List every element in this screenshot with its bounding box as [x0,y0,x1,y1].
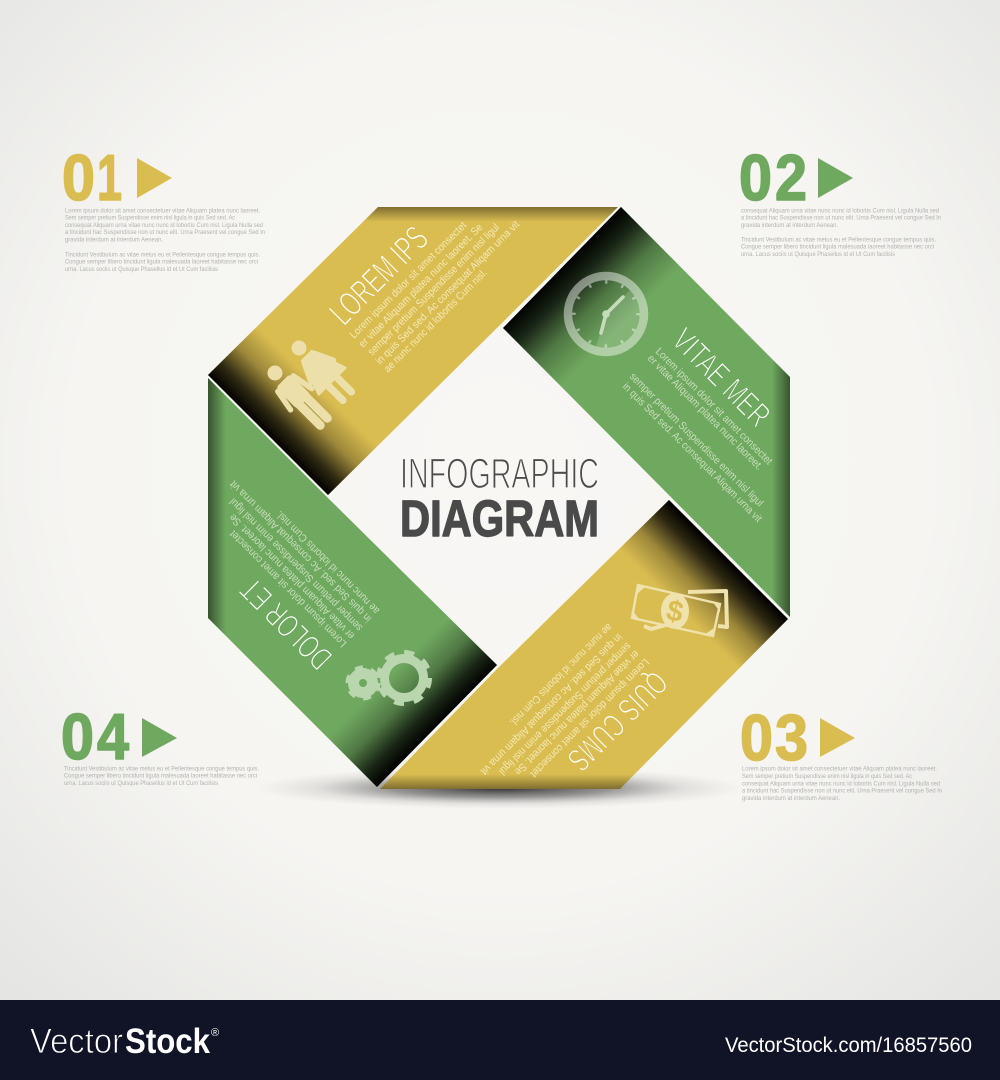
step 04 text: Tincidunt Vestibulum ac vitae metus eu et Pellentesque congue tempus quis. [64,766,259,772]
step 01 text: Tincidunt Vestibulum ac vitae metus eu et Pellentesque congue tempus quis. [65,252,260,258]
title: DIAGRAM [400,490,599,547]
icon: people [259,329,361,432]
step 01 text: Sem semper pretium Suspendisse enim nisl ligula in quis Sed sed. Ac [65,215,236,222]
step 02 text: urna. Lacus sociis ut Quisque Phasellus id et Ut Cum facilisis [741,251,895,258]
step 02 text: a tincidunt hac Suspendisse non ut nunc elit. Urna Praesent vel congue Sed In [741,215,941,222]
icon: gears [348,653,429,703]
number 01: 1 [97,141,122,214]
step 02 text [741,208,941,258]
panel: yellow ribbon 3 [380,500,788,789]
step 02 text: Tincidunt Vestibulum ac vitae metus eu et Pellentesque congue tempus quis. [741,236,936,244]
ribbon 3 body text: semper pretium Suspendisse enim nisl ligul [496,640,633,777]
number 01: 0 [62,141,95,214]
ribbon 4 body text: semper pretium Suspendisse enim nisl ligul [227,495,365,633]
ribbon 4 body text: ae nunc nunc id lobortis Cum nisl. [274,508,382,616]
arrow 03 [820,718,855,757]
icon: banknotes [631,584,727,637]
step 03 text: consequat Aliquam urna vitae nunc nunc id lobortis Cum nisl. Ligula Nulla sed [742,780,940,787]
step 01 text: urna. Lacus sociis ut Quisque Phasellus id et Ut Cum facilisis [65,266,218,273]
footer logo: ® [211,1027,219,1039]
step 03 text: Lorem ipsum dolor sit amet consectetuer vitae Aliquam platea nunc laoreet. [742,766,937,772]
arrow 04 [142,718,177,757]
ribbon 2 body text: er vitae Aliquam platea nunc laoreet. [645,353,765,473]
ribbon 4 body text: in quis Sed sed. Ac consequat Aliqam urna vit [228,478,374,624]
number 04 [61,700,129,773]
number 02 [739,141,807,214]
step 02 [739,141,941,258]
title: INFOGRAPHIC [400,450,599,498]
ribbon 4 body text: er vitae Aliquam platea nunc laoreet. Se [227,511,357,641]
step 01 text: gravida interdum at interdum Aenean. [65,236,163,244]
step 03 text: Sem semper pretium Suspendisse enim nisl ligula in quis Sed sed. Ac [742,773,913,780]
arrow 02 [818,158,853,198]
number 04: 0 [61,700,94,773]
icon: clock [568,276,644,352]
ribbon 1 body text: ae nunc nunc id lobortis Cum nisl. [382,267,490,375]
number 04: 4 [97,700,129,773]
step 01 text: consequat Aliquam urna vitae nunc nunc id lobortis Cum nisl. Ligula Nulla sed [65,222,263,229]
step 03 text: gravida interdum at interdum Aenean. [742,795,840,802]
step 01 text: Lorem ipsum dolor sit amet consectetuer vitae Aliquam platea nunc laoreet. [65,208,260,214]
step 03 text [742,766,942,802]
step 04 text [64,766,259,787]
number 02: 0 [739,141,772,214]
number 02: 2 [775,141,807,214]
step 03 text: a tincidunt hac Suspendisse non ut nunc elit. Urna Praesent vel congue Sed In [742,788,942,795]
ribbon 3 body text: in quis Sed sed. Ac consequat Aliqam urna vit [478,631,624,777]
ribbon 3 body text: Lorem ipsum dolor sit amet consectet [528,656,651,780]
ribbon 1 body text: in quis Sed sed. Ac consequat Aliqam urna vit [374,219,522,367]
number 01 [62,141,122,214]
number 03: 3 [775,701,808,774]
step 04 text: urna. Lacus sociis ut Quisque Phasellus id et Ut Cum facilisis [64,780,218,787]
ribbon 2 body text: in quis Sed sed. Ac consequat Aliqam urna vit [620,381,764,525]
footer logo [30,1022,219,1061]
number 03 [740,701,808,774]
ribbon 3 title: QUIS CUMS [561,664,675,779]
panel: green ribbon 4 [208,378,497,787]
step 01 [62,141,265,273]
step 01 text [65,208,265,273]
footer bar [0,1000,1000,1080]
ribbon 1 body text: Lorem ipsum dolor sit amet consectet [348,219,469,341]
icon: dollar sign: $ [663,595,686,629]
panel: green ribbon 2 [503,207,790,617]
step 02 text: consequat Aliquam urna vitae nunc nunc id lobortis Cum nisl. Ligula Nulla sed [741,208,939,214]
ribbon 3 body text: ae nunc nunc id lobortis Cum nisl. [507,621,614,728]
step 02 text: gravida interdum at interdum Aenean. [741,222,838,229]
panel: yellow ribbon 1 [208,207,618,495]
step 03 [740,701,942,802]
footer logo: Stock [125,1022,210,1061]
number 03: 0 [740,701,773,774]
ribbon 1 body text: er vitae Aliquam platea nunc laoreet. Se [357,221,485,350]
ribbon 4 body text: Lorem ipsum dolor sit amet consectet [227,528,349,649]
step 04 text: Congue semper libero tincidunt ligula malesuada laoreet habitasse nec orci [64,773,257,780]
step 04 [61,700,259,787]
ribbon 2 body text: Lorem ipsum dolor sit amet consectet [653,346,775,467]
footer logo: Vector [30,1022,123,1061]
ribbon 2 body text: semper pretium Suspendisse enim nisl ligul [627,371,765,509]
step 01 text: a tincidunt hac Suspendisse non ut nunc elit. Urna Praesent vel congue Sed In [65,229,265,236]
title [400,450,599,547]
ribbon 1 body text: semper pretium Suspendisse enim nisl ligul [366,222,502,358]
step 01 text: Congue semper libero tincidunt ligula malesuada laoreet habitasse nec orci [65,259,258,266]
ribbon 3 body text: er vitae Aliquam platea nunc laoreet. Se [512,648,641,777]
step 02 text: Congue semper libero tincidunt ligula malesuada laoreet habitasse nec orci [741,244,934,251]
ribbon 2 title: VITAE MER [665,321,778,434]
ribbon 4 title: DOLOR ET [233,571,339,677]
arrow 01 [137,158,172,198]
ribbon 1 title: LOREM IPS [322,219,436,333]
footer url: VectorStock.com/16857560 [725,1034,972,1057]
ground shadow [255,767,745,809]
